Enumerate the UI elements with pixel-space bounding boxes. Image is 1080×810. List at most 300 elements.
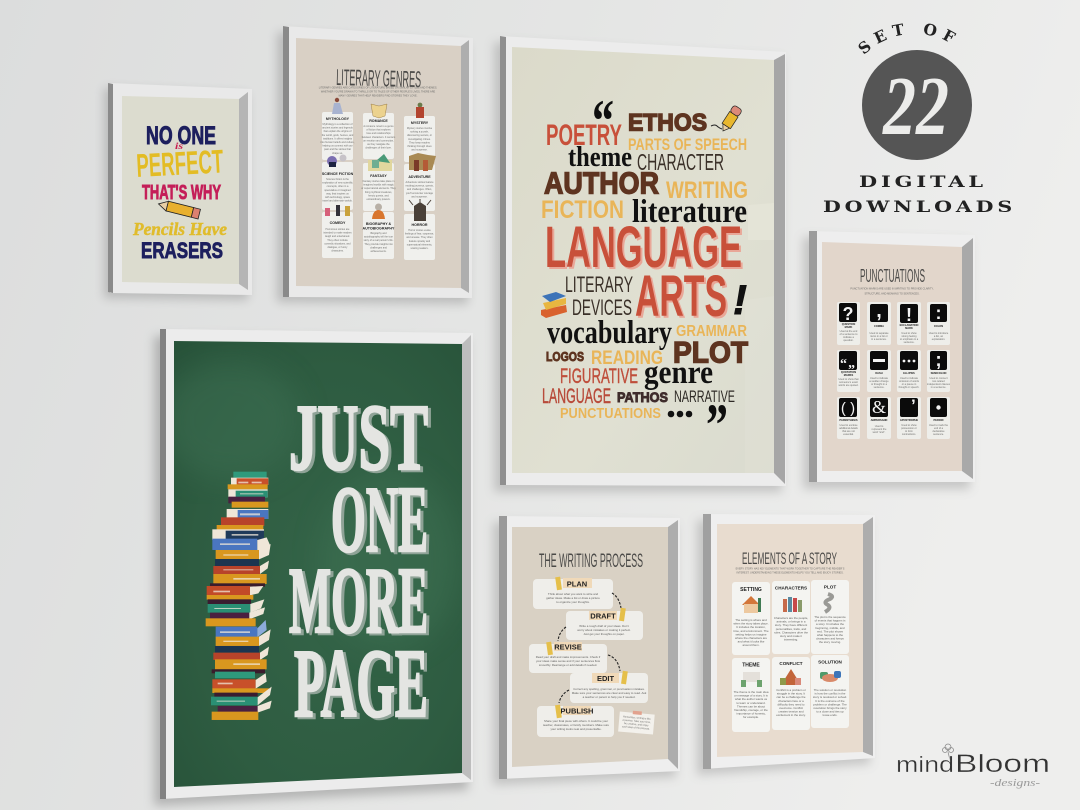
card: comedy: They often include <box>327 239 348 242</box>
card: period: declarative <box>932 430 945 433</box>
step: edit: EDIT <box>597 674 614 683</box>
icon: exclamation mark: ! <box>733 276 747 323</box>
step: publish: your writing looks neat and presentable. <box>550 727 602 731</box>
card: quotation marks: ” <box>848 363 855 378</box>
card: characters: story. They have different <box>775 623 807 627</box>
card: question marks: question. <box>843 339 854 342</box>
subtitle: LITERARY GENRES ARE CATEGORIES OF LITERATURE BASED ON SIMILAR STYLES AND THEMES. <box>319 86 438 90</box>
card: period: end of a <box>934 427 944 430</box>
card: setting: The setting is where and <box>735 618 767 622</box>
frame: Elements of a story poster <box>697 514 875 775</box>
card: characters: CHARACTERS <box>775 586 807 590</box>
note card <box>618 710 655 735</box>
subtitle: WHETHER YOU'RE DRAWN TO THRILLS OR TO TALES OF OTHER PEOPLE'S LIVES, THERE ARE <box>321 90 436 94</box>
word: plot: PLOT <box>673 336 748 370</box>
subtitle: PUNCTUATION MARKS ARE USED IN WRITING TO PROVIDE CLARITY, <box>850 288 934 290</box>
step: draft: Write a rough draft of your ideas. Don't <box>579 624 629 628</box>
card: mythology: past and the stories that <box>324 148 351 151</box>
card: colon <box>927 302 950 345</box>
card: plot: the story moving. <box>819 640 841 644</box>
phrase: parts of speech: PARTS OF SPEECH <box>628 135 747 154</box>
card: semicolon: in a sentence. <box>931 386 947 389</box>
card: adventure: Adventure stories feature <box>406 181 434 184</box>
card: plot: beginning, middle, and <box>815 626 845 630</box>
card: adventure: ADVENTURE <box>408 175 431 179</box>
card: adventure: exciting journeys, quests, <box>405 185 434 188</box>
card: mythology <box>320 112 355 160</box>
step: revise: Read your draft and make improvements. Check if <box>536 655 600 659</box>
card: question marks <box>837 302 860 345</box>
card: mystery: discovering secrets, or <box>407 134 432 137</box>
card: biography: BIOGRAPHY & <box>366 222 392 226</box>
card: ampersand <box>867 397 891 439</box>
card: adventure: you'll encounter courage <box>406 192 434 195</box>
icon: open book <box>371 104 387 118</box>
word: page: PAGE <box>297 632 431 739</box>
card: horror: HORROR <box>412 223 428 227</box>
card: characters <box>772 581 810 654</box>
word: fiction: FICTION <box>541 196 624 224</box>
word: is: is <box>175 141 184 151</box>
frame: Punctuations poster: PUNCTUATIONS <box>860 266 925 286</box>
card: mystery: MYSTERY <box>411 121 429 125</box>
card: setting <box>732 582 770 655</box>
card: exclamation mark: ! <box>906 305 912 325</box>
illustration: stack of books <box>206 472 272 720</box>
card: parentheses: additional details <box>839 427 859 430</box>
card: comedy: dialogue, or funny <box>328 246 348 249</box>
word: logos: LOGOS <box>546 349 584 364</box>
card: semicolon: ; <box>935 350 942 371</box>
label: digital: DIGITAL <box>859 172 987 191</box>
card: horror <box>404 214 435 260</box>
word: arts: ARTS <box>637 266 729 331</box>
card: conflict: characters face or a <box>778 699 804 703</box>
card: science fiction: way, that inspires us <box>326 192 349 195</box>
circle <box>862 50 972 160</box>
card: conflict <box>772 657 810 730</box>
card: fantasy: FANTASY <box>370 174 387 178</box>
card: conflict: excitement in the story. <box>776 713 806 717</box>
icon: science fiction <box>327 154 346 167</box>
card: question marks: Used at the end <box>840 330 858 333</box>
word: character: CHARACTER <box>637 149 724 175</box>
word: perfect: PERFECT <box>135 142 224 184</box>
word: literature: literature <box>632 194 747 230</box>
card: dash: sentence. <box>874 386 885 389</box>
card: ampersand: AMPERSAND <box>871 418 887 422</box>
step: plan <box>533 578 613 609</box>
card: semicolon <box>927 350 951 392</box>
card: plot: PLOT <box>824 584 836 590</box>
card: romance: A romance novel is a genre <box>363 125 394 128</box>
number 22: 22 <box>881 60 949 153</box>
card: comma: items in a list or <box>870 335 888 338</box>
card: fantasy: heroic quests, and <box>368 194 389 197</box>
icon: closing quote: ” <box>706 392 728 458</box>
phrase: pencils have: Pencils Have <box>132 219 227 239</box>
card: ellipsis <box>897 350 921 392</box>
card: solution: The solution or resolution <box>814 688 847 692</box>
card: dash: DASH <box>875 371 883 375</box>
card: mystery: solving a puzzle, <box>410 131 429 134</box>
card: plot: end. The plot shows <box>817 629 843 633</box>
card: theme: friendship, courage, or the <box>734 708 768 712</box>
card: comedy <box>322 212 353 258</box>
card: biography <box>363 212 395 259</box>
note card: each step of the process. <box>622 725 650 731</box>
step: publish: Share your final piece with others. It could be your <box>544 719 608 723</box>
word: arts: ARTS <box>635 264 727 329</box>
card: ampersand: represent the <box>872 428 887 431</box>
logo word: bloom: Bloom <box>955 750 1050 778</box>
card: parentheses: PARENTHESIS <box>839 418 858 422</box>
card: biography: story of a real person's life. <box>364 239 394 242</box>
word: reading: READING <box>591 348 663 369</box>
word: theme: theme <box>568 142 632 173</box>
card: semicolon: SEMICOLON <box>931 371 946 375</box>
card: comedy: intended to make readers <box>323 232 352 235</box>
card: romance: as they navigate the <box>367 143 390 146</box>
card: semicolon: Used to connect <box>929 377 948 380</box>
card: comma <box>867 300 891 345</box>
word: language small: LANGUAGE <box>542 385 611 408</box>
card: mythology: the world, gods, heroes, and <box>322 134 354 137</box>
card: theme: to learn or understand. <box>736 701 766 705</box>
card: conflict: creates tension and <box>778 710 804 714</box>
subtitle <box>319 86 438 98</box>
card: romance: challenges of their love. <box>365 147 392 150</box>
card: colon: explanation. <box>932 338 946 341</box>
card: colon: : <box>936 303 942 323</box>
card: apostrophe: ’ <box>911 396 916 415</box>
card: characters: interesting. <box>784 638 798 642</box>
card: mythology: Mythology is a collection of <box>323 123 353 126</box>
card: science fiction: travel and alternate worlds. <box>322 200 353 203</box>
word: devices: DEVICES <box>572 295 632 320</box>
card: exclamation mark: strong feeling <box>901 335 917 338</box>
card: science fiction: with technology, space <box>325 196 351 199</box>
step: revise: your ideas make sense and if your sentences flow <box>536 659 601 663</box>
card: question marks: QUESTION <box>842 322 855 326</box>
card: adventure: and challenges. Often, <box>407 188 432 191</box>
card: solution: loose ends. <box>823 713 838 717</box>
step: publish: PUBLISH <box>561 706 593 716</box>
card: mythology: ancient stories and legends <box>322 127 353 130</box>
step: revise <box>529 642 607 673</box>
card: exclamation mark: EXCLAMATION <box>900 323 919 327</box>
card: exclamation mark: sentence. <box>904 341 915 344</box>
note card: a journey. Take your time, <box>622 719 651 724</box>
card: comedy: comedic situations, and <box>324 242 351 245</box>
word: author: AUTHOR <box>544 166 659 200</box>
card: apostrophe: possession or <box>901 427 917 430</box>
card: dash <box>867 350 891 392</box>
card: setting: when the story takes place. <box>733 622 769 626</box>
card: question marks: of a sentence to <box>840 333 858 336</box>
frame: Literary genres poster <box>277 26 473 304</box>
step: draft <box>566 611 643 640</box>
card: period: PERIOD <box>934 418 944 422</box>
icon: book stack <box>541 292 567 318</box>
card: theme: for example. <box>743 715 759 719</box>
card: characters: Characters are the people, <box>774 616 808 620</box>
frame: Punctuations poster <box>803 231 975 489</box>
card: dash: or thought in a <box>871 383 888 386</box>
word: writing: WRITING <box>666 177 748 204</box>
card: ellipsis: omission of words <box>899 380 920 383</box>
card: theme <box>732 658 770 732</box>
step: plan: gather ideas. Make a list or draw a picture <box>546 596 600 600</box>
card: period <box>927 397 950 439</box>
card: colon: a list, an <box>934 335 944 338</box>
frame: Just one more page poster: MORE <box>289 549 428 653</box>
card: biography: They provide insights into <box>364 243 393 246</box>
card: fantasy: or supernatural elements. They <box>361 187 397 190</box>
card: solution <box>811 655 849 728</box>
step: publish: teacher, classmates, or family members. Make sure <box>543 723 609 727</box>
phrase: that's why: THAT'S WHY <box>142 182 221 204</box>
card: theme: what the author wants us <box>735 697 768 701</box>
card: biography: challenges and <box>370 246 388 249</box>
card: apostrophe: contractions. <box>902 433 916 436</box>
card: fantasy: bring mythical creatures, <box>365 191 392 194</box>
card: parentheses: essential. <box>843 433 854 436</box>
card: fantasy: extraordinary powers. <box>366 198 391 201</box>
word: more <box>289 549 431 655</box>
card: setting: around them. <box>742 643 760 647</box>
card: romance: on emotion and connection, <box>363 139 394 142</box>
card: theme: Themes can be about <box>737 704 765 708</box>
card: ampersand: & <box>872 397 886 417</box>
word: language shadow and face <box>545 215 744 282</box>
card: romance: ROMANCE <box>369 119 388 123</box>
card: dash: a sudden change <box>869 380 889 383</box>
card: comedy: laugh and entertained. <box>325 235 350 238</box>
card: setting: setting helps us imagine <box>735 632 767 636</box>
title: just one more page <box>289 386 431 739</box>
card: mythology: helping us connect with our <box>322 145 353 148</box>
card: mystery: investigating crimes. <box>408 138 431 141</box>
subtitle <box>850 288 934 296</box>
card: semicolon: independent clauses <box>927 383 951 386</box>
word: grammar: GRAMMAR <box>676 323 747 340</box>
card: mythology: traditions. It offers insights <box>323 137 353 140</box>
card: conflict: Conflict is a problem or <box>776 688 806 692</box>
step: revise: REVISE <box>554 642 582 652</box>
card: quotation marks <box>837 350 860 392</box>
card: horror: and unease. They often <box>406 236 433 239</box>
logo word: mind: mind <box>896 752 954 777</box>
card: comedy: Humorous stories are <box>326 228 350 231</box>
card: semicolon: two related <box>932 380 945 383</box>
step: edit: Make sure your sentences are clear and easy to read. Ask <box>572 691 647 695</box>
frame: The writing process poster <box>493 516 680 785</box>
icon: opening quote: “ <box>592 88 614 154</box>
word: literary: LITERARY <box>565 272 633 297</box>
word: one <box>331 468 431 574</box>
card: solution: It is the outcome of the <box>815 699 845 703</box>
card: plot: characters and keeps <box>816 637 844 641</box>
card: romance: between characters. It centers <box>362 136 396 139</box>
card: quotation marks: someone's exact <box>839 381 858 384</box>
card: theme: or message of a story. It is <box>734 694 768 698</box>
card: fantasy: Fantasy stories take place in <box>363 180 395 183</box>
card: comedy: characters. <box>331 250 344 253</box>
card: conflict: CONFLICT <box>779 661 803 666</box>
word: page: PAGE <box>294 630 428 737</box>
card: apostrophe: Used to show <box>901 424 917 427</box>
card: colon: COLON <box>934 324 943 328</box>
card: fantasy <box>361 163 397 211</box>
word: narrative: NARRATIVE <box>674 387 735 406</box>
card: colon: Used to introduce <box>929 332 949 335</box>
card: comma: Used to separate <box>869 332 889 335</box>
card: science fiction: exploration of new scientific <box>322 182 354 185</box>
word: erasers: ERASERS <box>141 238 223 263</box>
word: page <box>294 630 431 739</box>
card: characters: roles. Characters drive the <box>774 630 808 634</box>
card: apostrophe: to form <box>905 430 913 433</box>
subtitle: STRUCTURE, AND MEANING TO SENTENCES. <box>864 292 920 296</box>
heading: no one: NO ONE <box>146 122 216 150</box>
card: mystery <box>404 116 435 162</box>
logo flower <box>942 744 954 764</box>
card: horror: supernatural elements, <box>407 243 433 246</box>
card: horror: feature spooky and <box>409 240 431 243</box>
card: science fiction: SCIENCE FICTION <box>322 172 354 176</box>
step: draft: DRAFT <box>590 612 616 620</box>
card: romance: of fiction that explores <box>366 129 391 132</box>
card: mythology: into human beliefs and culture, <box>320 141 355 144</box>
step: edit: Correct any spelling, grammar, or punctuation mistakes. <box>573 687 645 691</box>
card: theme: THEME <box>742 662 760 668</box>
card: quotation marks: words are quoted. <box>838 384 859 387</box>
frame: Just one more page poster: ONE <box>334 470 431 574</box>
card: solution: SOLUTION <box>818 660 843 664</box>
step: publish <box>537 706 614 737</box>
frame: No one is perfect poster <box>104 83 252 300</box>
card: mythology: MYTHOLOGY <box>326 117 350 121</box>
step: plan: PLAN <box>567 580 587 588</box>
card: ampersand: Used to <box>875 425 884 428</box>
card: conflict: struggle in the story. It <box>777 692 805 696</box>
icon: adventure scene <box>409 153 436 171</box>
word: poetry: POETRY <box>546 119 622 152</box>
icon: pencil <box>157 199 200 219</box>
frame: Just one more page poster <box>154 329 473 806</box>
arc text: set of: SET OF <box>858 23 956 54</box>
card: apostrophe: APOSTROPHE <box>900 418 918 422</box>
card: quotation marks: Used to show that <box>838 378 859 381</box>
card: period: Used to mark the <box>929 424 949 427</box>
card: comma: COMMA <box>874 324 884 328</box>
frame: Elements of a story poster: ELEMENTS OF A STORY <box>742 549 837 568</box>
word: arts <box>635 264 729 331</box>
frame: Language arts word cloud poster <box>494 36 786 492</box>
word: just: JUST <box>289 386 428 490</box>
icon: comedy figures <box>325 205 350 216</box>
card: setting: SETTING <box>740 587 762 593</box>
card: science fiction: Science fiction is the <box>326 178 350 181</box>
card: romance <box>362 113 396 159</box>
step: plan: Think about what you want to write and <box>548 592 598 596</box>
card: question marks: indicate a <box>843 336 854 339</box>
card: setting: It includes the location, <box>736 625 766 629</box>
card: biography: Biography and <box>370 232 387 235</box>
label: downloads: DOWNLOADS <box>823 197 1016 216</box>
card: mythology: that explain the origins of <box>324 130 352 133</box>
card: horror: scaring readers. <box>411 247 429 250</box>
word: just <box>289 386 431 492</box>
card: exclamation mark: or emphasis in a <box>900 338 919 341</box>
card: fantasy: imagined worlds with magic <box>363 184 395 187</box>
card: plot: what happens to the <box>817 633 843 637</box>
card: biography: autobiography tell the true <box>364 236 394 239</box>
card: ellipsis: ELLIPSIS <box>903 371 915 375</box>
card: solution: is how the conflict in the <box>815 692 846 696</box>
card: question marks: ? <box>842 304 854 324</box>
card: plot: a story. It includes the <box>816 622 844 626</box>
subtitle: EVERY STORY HAS KEY ELEMENTS THAT WORK TOGETHER TO CAPTURE THE READER'S <box>736 568 845 570</box>
word: genre: genre <box>644 355 713 391</box>
step: edit: a teacher or parent to help you if needed. <box>583 695 636 699</box>
card: quotation marks: MARKS <box>844 373 854 377</box>
card: solution: resolution brings the story <box>813 706 847 710</box>
card: parentheses: Used to enclose <box>840 424 858 427</box>
word: pathos: PATHOS <box>617 389 668 405</box>
step: revise: smoothly. Rearrange or add details if needed. <box>539 663 597 667</box>
word: vocabulary: vocabulary <box>547 315 672 351</box>
card: comedy: COMEDY <box>330 221 346 225</box>
card: comma: in a sentence. <box>871 338 887 341</box>
step: draft: Just get your thoughts on paper. <box>583 632 625 636</box>
word: language shadow and face: LANGUAGE <box>545 215 742 280</box>
card: solution: story is resolved or solved. <box>813 695 847 699</box>
card: parentheses <box>837 397 860 439</box>
card: plot <box>811 580 849 654</box>
card: characters: personalities, traits, and <box>776 627 807 631</box>
card: question marks: MARK <box>845 325 853 329</box>
step: edit <box>570 673 648 703</box>
card: setting: and what it looks like <box>738 640 765 644</box>
card: mythology: shape us. <box>332 152 343 155</box>
card: mystery: Mystery stories involve <box>407 127 433 130</box>
card: period: sentence. <box>933 433 944 436</box>
card: setting: time, and environment. The <box>733 629 769 633</box>
card: parentheses: ( ) <box>841 400 855 417</box>
card: plot: The plot is the sequence <box>814 615 846 619</box>
card: mystery: and suspense. <box>411 149 428 152</box>
card: mystery: thinking through clues <box>407 145 432 148</box>
card: science fiction: speculative or imagined <box>324 189 351 192</box>
card: plot: of events that happen in <box>815 619 846 623</box>
subtitle: INTEREST. UNDERSTANDING THESE ELEMENTS HELPS YOU TELL AND ENJOY STORIES. <box>737 572 844 574</box>
icon: haunted house <box>409 199 431 221</box>
card: conflict: can be a challenge the <box>776 695 806 699</box>
card: solution: problem or challenge. The <box>813 702 847 706</box>
icon: pencil <box>711 105 742 134</box>
card: biography: achievements. <box>370 250 387 253</box>
card: adventure: and suspense. <box>411 195 428 198</box>
card: dash: Used to indicate <box>870 377 889 380</box>
step: plan: to organize your thoughts. <box>556 600 590 604</box>
logo: mind bloom designs <box>896 744 1050 789</box>
card: quotation marks: “ <box>840 357 847 372</box>
icon: detective <box>416 103 424 118</box>
card: ellipsis: Used to indicate <box>900 377 919 380</box>
card: ellipsis: or a pause in <box>902 383 917 386</box>
